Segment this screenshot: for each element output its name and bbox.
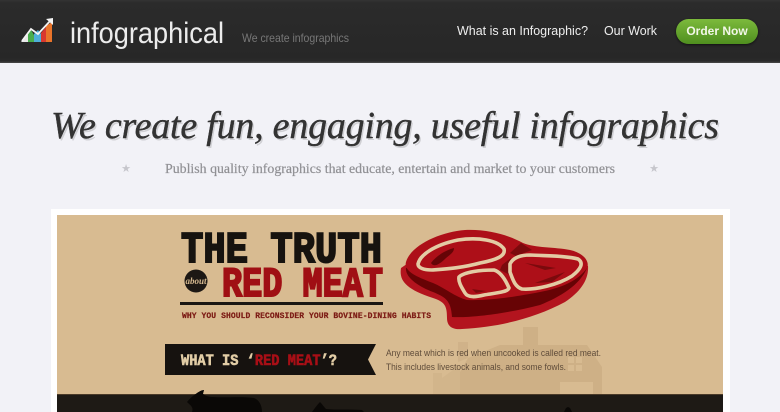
nav link: our work: Our Work <box>604 23 657 38</box>
text: definition <box>386 348 601 373</box>
icon: left star: ★ <box>121 163 131 175</box>
badge: about <box>184 270 208 292</box>
illustration: farm silhouette <box>458 327 602 394</box>
badge: about: about <box>185 276 207 286</box>
icon: small animal silhouette <box>564 407 572 412</box>
icon: right star: ★ <box>649 163 659 175</box>
icon: logo chart <box>21 18 53 42</box>
main heading: We create fun, engaging, useful infographics <box>52 107 720 149</box>
text: definition: This includes livestock animals, and some fowls. <box>386 362 566 373</box>
infographic frame <box>51 209 730 412</box>
panel: tan poster <box>57 215 723 412</box>
title rule <box>180 302 383 304</box>
main heading: We create fun, engaging, useful infographics <box>51 105 719 147</box>
icon: red steak <box>400 230 588 330</box>
icon: goat silhouette <box>312 402 364 412</box>
banner: what is red meat <box>165 344 376 375</box>
subtitle: WHY YOU SHOULD RECONSIDER YOUR BOVINE-DINING HABITS <box>182 312 431 321</box>
icon: cow silhouette <box>187 390 262 412</box>
banner: what is red meat: WHAT IS ‘RED MEAT’? <box>181 352 337 370</box>
button: order now <box>676 19 758 44</box>
button: order now: Order Now <box>686 24 748 38</box>
panel: dark band <box>57 394 723 412</box>
header bar <box>0 0 780 63</box>
nav link: what is an infographic: What is an Infographic? <box>457 23 588 38</box>
subheading: Publish quality infographics that educate, entertain and market to your customers <box>165 162 615 177</box>
